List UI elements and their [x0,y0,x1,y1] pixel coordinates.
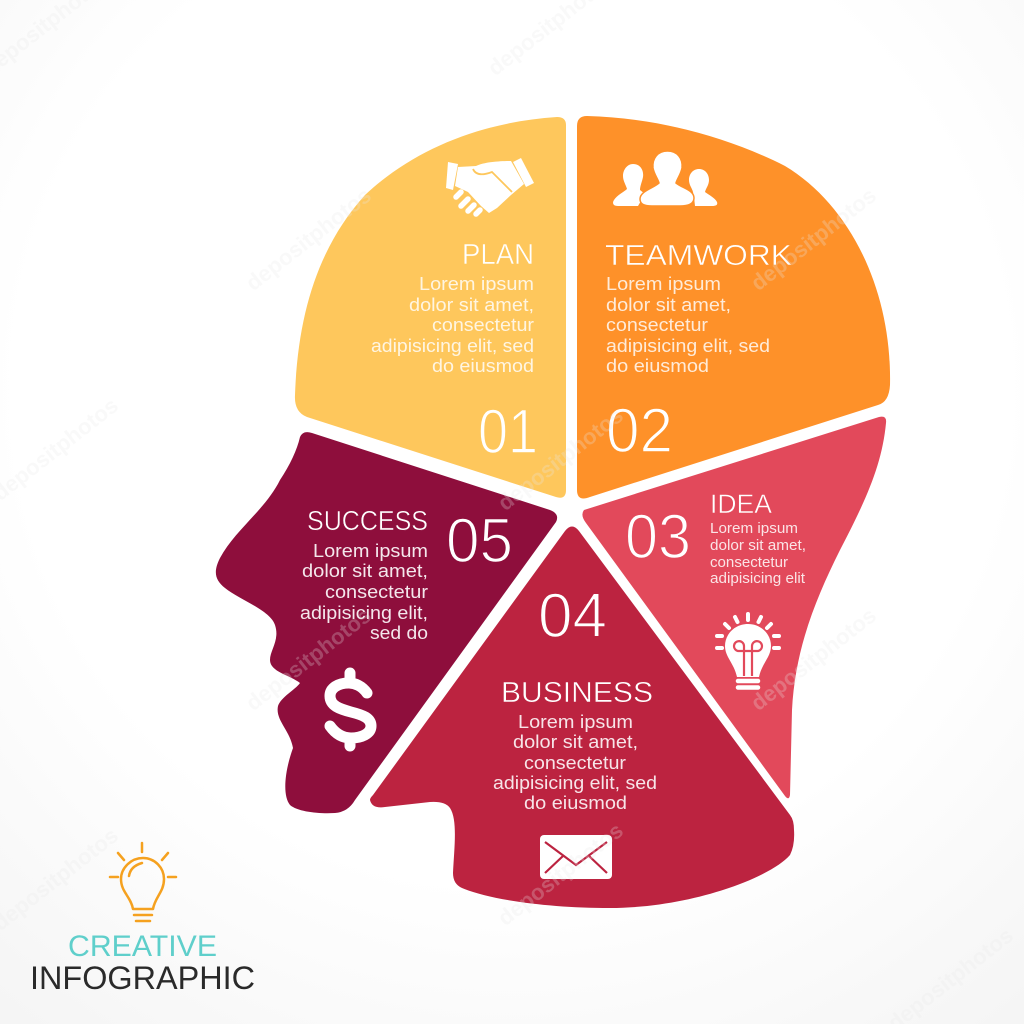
segment shape: success [216,432,557,813]
icon: envelope [540,835,612,879]
text block: success [300,541,428,643]
text block: success: consectetur [325,582,428,602]
text block: teamwork: adipisicing elit, sed [606,336,770,356]
panel: 02 teamwork [577,116,890,498]
segment shape: idea [582,417,886,798]
text block: plan: dolor sit amet, [409,295,534,315]
watermarks: depositphotos [493,403,628,516]
watermarks: depositphotos [746,183,881,296]
text block: business: adipisicing elit, sed [493,773,657,793]
text block: idea [710,520,806,587]
heading: teamwork: TEAMWORK [605,240,793,272]
watermarks: depositphotos [241,603,376,716]
heading: idea: IDEA [710,489,772,519]
panel: 03 idea [582,417,886,798]
panel: 01 plan [295,117,566,498]
logo: creative infographic [30,843,255,996]
heading: business: BUSINESS [501,677,653,709]
text block: plan [371,274,534,376]
icon: people [613,151,717,206]
segment shape: teamwork [577,116,890,498]
text block: teamwork [606,274,770,376]
text block: business: Lorem ipsum [518,712,633,732]
title: infographic: INFOGRAPHIC [30,960,255,996]
text block: success: dolor sit amet, [302,561,428,581]
text block: business: do eiusmod [524,793,627,813]
heading: success: SUCCESS [307,505,428,536]
text block: teamwork: do eiusmod [606,356,709,376]
watermarks: depositphotos [746,603,881,716]
number: 02: 02 [606,396,673,466]
text block: teamwork: consectetur [606,315,708,335]
text block: plan: consectetur [432,315,534,335]
text block: success: adipisicing elit, [300,603,428,623]
text block: idea: consectetur [710,554,788,571]
icon: dollar [330,673,371,746]
icon: light bulb [717,614,779,688]
text block: idea: dolor sit amet, [710,537,806,554]
text block: business: consectetur [524,753,626,773]
watermarks: depositphotos [241,183,376,296]
text block: business: dolor sit amet, [513,732,638,752]
text block: plan: do eiusmod [432,356,534,376]
text block: idea: adipisicing elit [710,570,806,587]
icon: handshake [446,158,534,214]
text block: success: Lorem ipsum [313,541,428,561]
number: 03: 03 [625,502,691,572]
number: 05: 05 [446,506,513,576]
text block: idea: Lorem ipsum [710,520,798,537]
title: creative: CREATIVE [68,930,217,963]
text block: plan: adipisicing elit, sed [371,336,534,356]
icon: outline bulb [110,843,176,921]
panel: 04 business [370,526,794,908]
text block: success: sed do [370,623,428,643]
text block: plan: Lorem ipsum [419,274,534,294]
number: 04: 04 [538,581,607,651]
segment shape: plan [295,117,566,498]
text block: teamwork: Lorem ipsum [606,274,721,294]
watermarks: depositphotos [493,818,628,931]
number: 01: 01 [478,397,538,467]
heading: plan: PLAN [462,239,534,271]
text block: business [493,712,657,813]
segment shape: business [370,526,794,908]
text block: teamwork: dolor sit amet, [606,295,731,315]
panel: 05 success [216,432,557,813]
